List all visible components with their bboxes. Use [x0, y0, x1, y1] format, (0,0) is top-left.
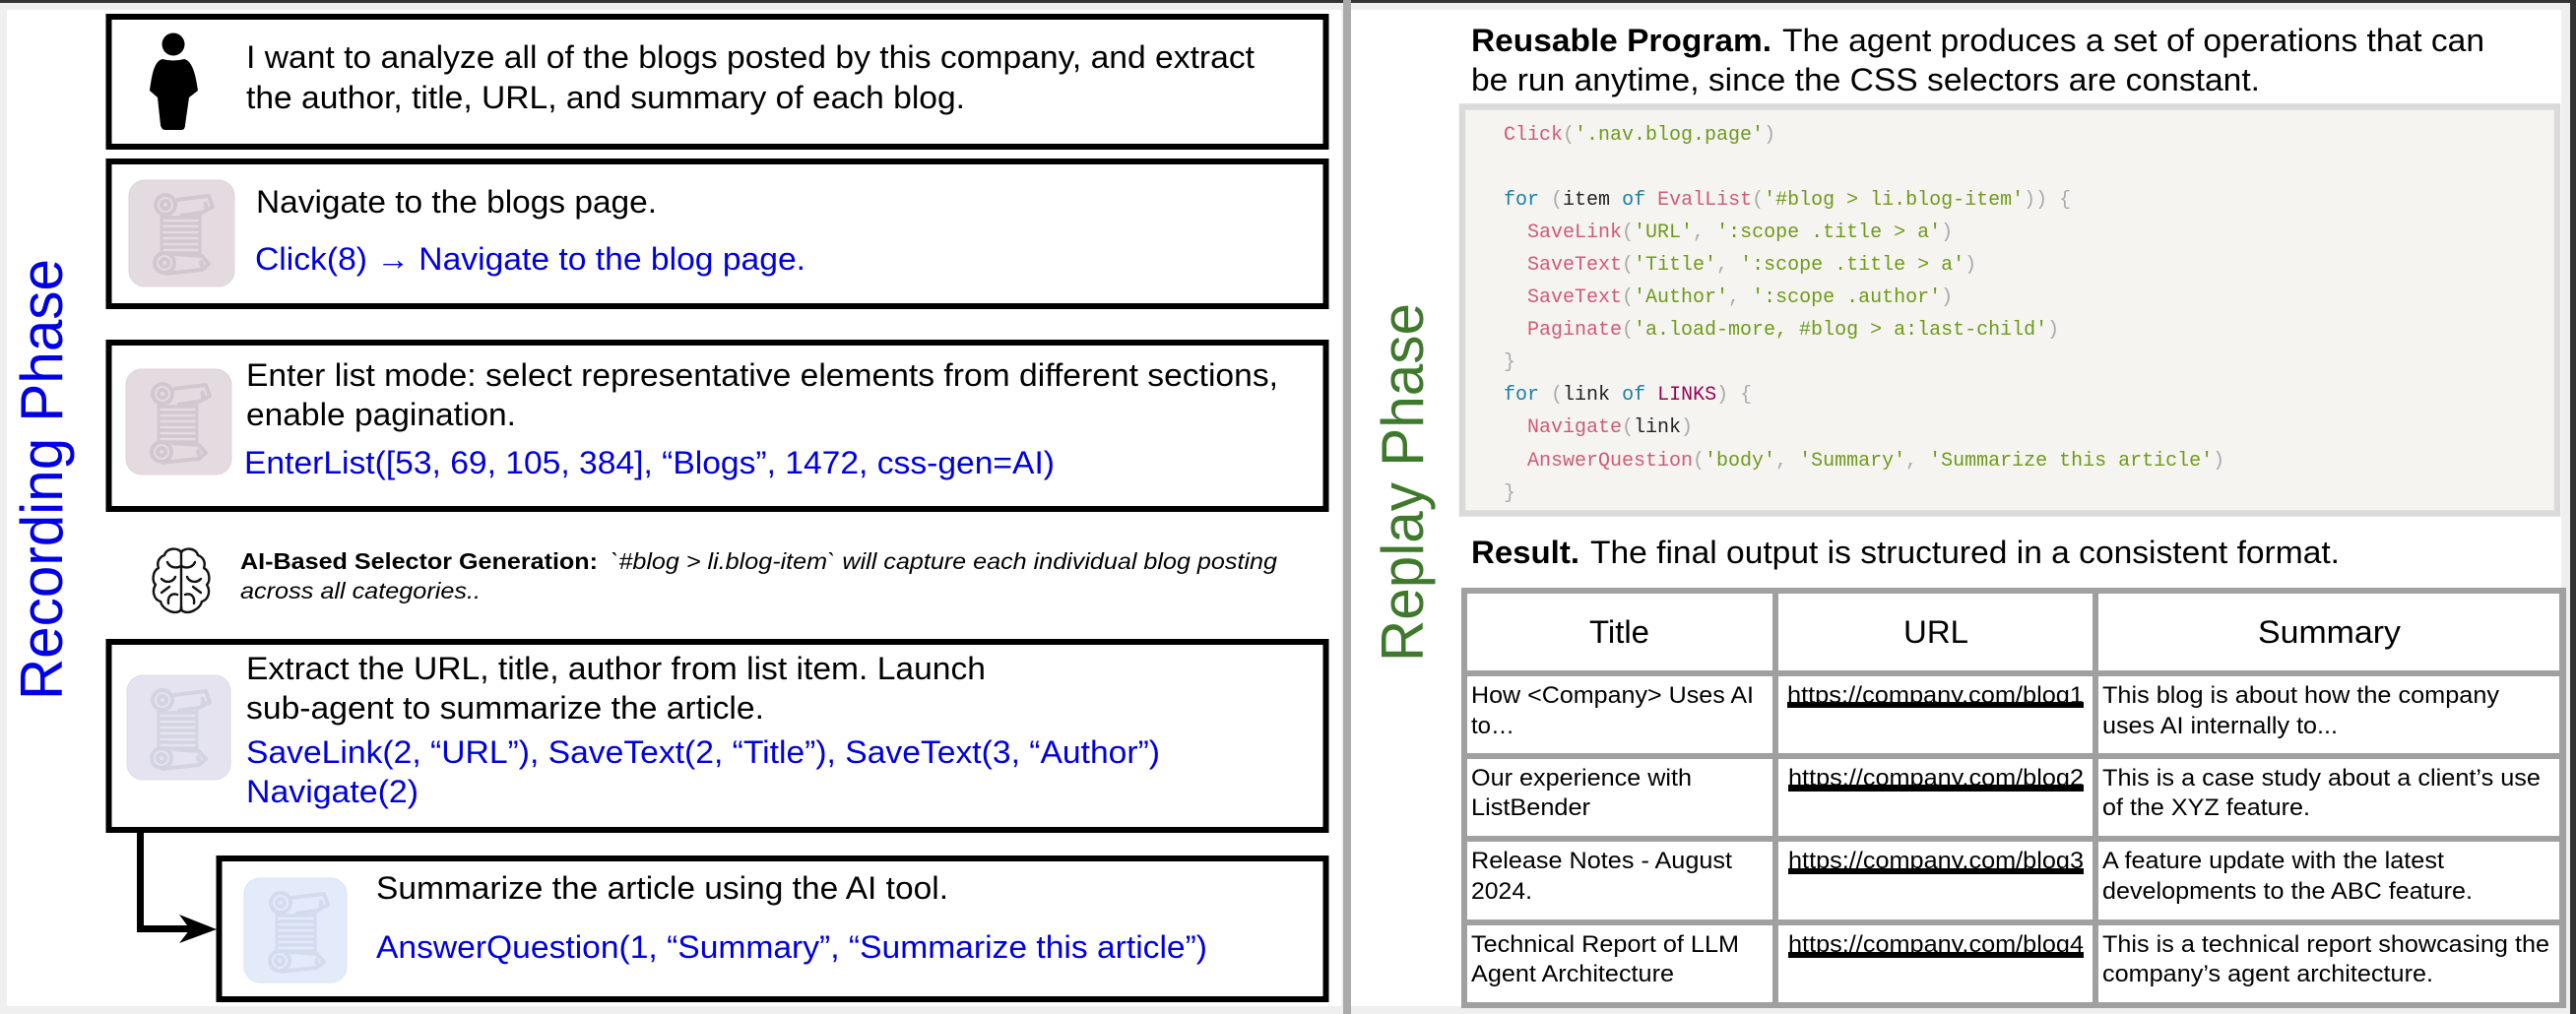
step text: enable pagination. — [246, 397, 516, 432]
table row 4: company’s agent architecture. — [2102, 961, 2433, 987]
code listing: Paginate('a.load-more, #blog > a:last-child') — [1527, 319, 2059, 342]
code listing: SaveText('Title', ':scope .title > a') — [1527, 254, 1976, 277]
box — [108, 17, 1325, 147]
top edge strip — [0, 0, 2576, 3]
table row 3: Release Notes - August — [1471, 848, 1732, 874]
panel: right background — [1351, 10, 2561, 1006]
icon: scroll — [127, 675, 230, 780]
action code: Navigate(2) — [246, 774, 419, 809]
icon: scroll — [129, 180, 234, 286]
step text: Summarize the article using the AI tool. — [376, 870, 948, 906]
callout text — [240, 548, 1277, 603]
result heading: The final output is structured in a consistent format. — [1590, 535, 2340, 570]
action code: AnswerQuestion(1, “Summary”, “Summarize this article”) — [376, 929, 1207, 965]
box — [108, 642, 1325, 830]
table row 1: uses AI internally to... — [2102, 713, 2338, 739]
code block — [1462, 106, 2557, 514]
step: extract fields — [108, 642, 1325, 830]
table row 1 — [1471, 682, 2499, 739]
table row 3: A feature update with the latest — [2102, 848, 2444, 874]
step: user request — [108, 17, 1325, 147]
table row 2: of the XYZ feature. — [2102, 794, 2310, 821]
icon: person — [150, 33, 198, 130]
vertical divider — [1343, 0, 1351, 1014]
table row 4: Agent Architecture — [1471, 961, 1674, 987]
table row 1: How <Company> Uses AI — [1471, 682, 1754, 709]
code background — [1462, 106, 2557, 514]
table row 2: https://company.com/blog2 — [1788, 765, 2084, 792]
table header: Summary — [2258, 614, 2401, 650]
table header: URL — [1903, 614, 1968, 650]
table row 4: Technical Report of LLM — [1471, 931, 1739, 958]
step text: Navigate to the blogs page. — [256, 184, 657, 220]
table row 4 — [1471, 931, 2549, 987]
code listing: SaveLink('URL', ':scope .title > a') — [1527, 222, 1953, 244]
table grid — [1461, 588, 2566, 1008]
result table — [1461, 588, 2566, 1008]
table row 3 — [1471, 848, 2473, 905]
icon: scroll — [126, 369, 231, 475]
step text — [246, 651, 986, 726]
step text — [246, 357, 1278, 432]
step text: Enter list mode: select representative elements from different sections, — [246, 357, 1278, 393]
table row 2 — [1471, 765, 2541, 821]
reusable program heading: be run anytime, since the CSS selectors are constant. — [1471, 62, 2260, 97]
panel: recording phase — [9, 17, 1325, 999]
box — [219, 858, 1325, 999]
table header — [1589, 614, 2401, 650]
step: navigate — [108, 161, 1325, 306]
step text: sub-agent to summarize the article. — [246, 690, 764, 726]
code listing: SaveText('Author', ':scope .author') — [1527, 286, 1953, 309]
action code — [246, 734, 1160, 809]
request text: I want to analyze all of the blogs posted by this company, and extract — [246, 39, 1255, 75]
table row 3: https://company.com/blog3 — [1788, 848, 2084, 874]
box — [108, 343, 1325, 509]
icon: scroll — [244, 878, 347, 982]
table row 3: 2024. — [1471, 878, 1532, 905]
code listing: } — [1504, 351, 1515, 374]
code listing: for (link of LINKS) { — [1504, 384, 1752, 407]
table row 4: https://company.com/blog4 — [1788, 931, 2084, 958]
heading: replay phase: Replay Phase — [1370, 303, 1436, 662]
panel: left background — [7, 10, 1341, 1006]
table row 1: to… — [1471, 713, 1514, 739]
callout: AI-based selector generation — [154, 548, 1277, 612]
result heading: Result. — [1471, 535, 1579, 570]
arrow: to sub-agent — [137, 833, 217, 943]
code listing: } — [1504, 482, 1515, 505]
box — [108, 161, 1325, 306]
table row 2: ListBender — [1471, 794, 1590, 821]
action code: Click(8) → Navigate to the blog page. — [255, 241, 805, 277]
table row 2: This is a case study about a client’s use — [2102, 765, 2541, 792]
action code: EnterList([53, 69, 105, 384], “Blogs”, 1472, css-gen=AI) — [244, 445, 1055, 480]
request text — [246, 39, 1255, 115]
icon: brain — [154, 549, 209, 612]
right edge strip — [2570, 0, 2576, 1014]
panel: replay phase — [1370, 23, 2566, 1008]
table row 2: Our experience with — [1471, 765, 1692, 792]
callout text: across all categories.. — [240, 578, 481, 603]
action code: SaveLink(2, “URL”), SaveText(2, “Title”), SaveText(3, “Author”) — [246, 734, 1160, 770]
step: sub-agent summarize — [219, 858, 1325, 999]
table header: Title — [1589, 614, 1649, 650]
callout text: AI-Based Selector Generation: — [240, 548, 598, 574]
table row 1: This blog is about how the company — [2102, 682, 2499, 709]
table row 3: developments to the ABC feature. — [2102, 878, 2473, 905]
step: enter list mode — [108, 343, 1325, 509]
request text: the author, title, URL, and summary of each blog. — [246, 80, 965, 115]
code listing: for (item of EvalList('#blog > li.blog-item')) { — [1504, 189, 2071, 212]
reusable program heading: Reusable Program. — [1471, 23, 1771, 58]
step text: Extract the URL, title, author from list item. Launch — [246, 651, 986, 686]
code listing — [1504, 124, 2224, 505]
reusable program heading: The agent produces a set of operations that can — [1782, 23, 2484, 58]
heading: recording phase: Recording Phase — [9, 259, 75, 700]
callout text: `#blog > li.blog-item` will capture each individual blog posting — [611, 548, 1277, 574]
code listing: Navigate(link) — [1527, 416, 1693, 439]
table row 4: This is a technical report showcasing the — [2102, 931, 2549, 958]
code listing: Click('.nav.blog.page') — [1504, 124, 1775, 147]
table row 1: https://company.com/blog1 — [1787, 682, 2084, 709]
reusable program heading — [1471, 23, 2484, 97]
code listing: AnswerQuestion('body', 'Summary', 'Summarize this article') — [1527, 450, 2224, 473]
